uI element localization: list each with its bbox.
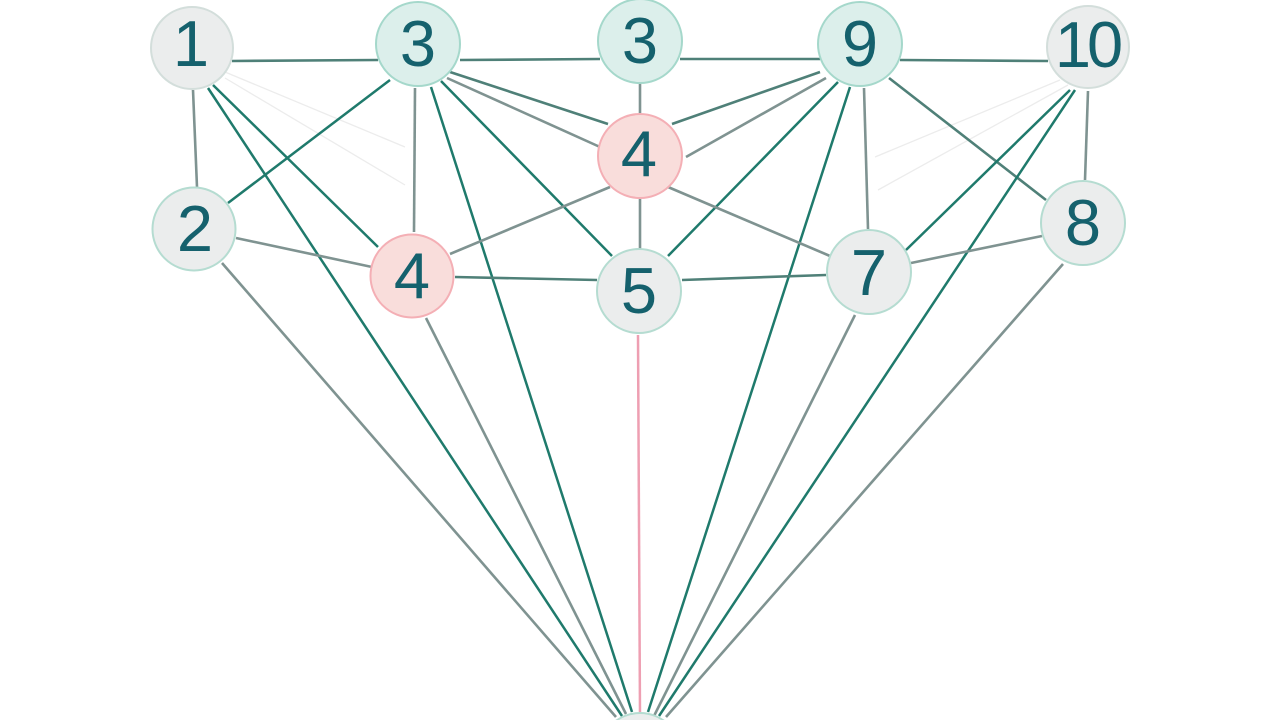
node 9: 9 xyxy=(842,7,878,80)
node 4 left, highlighted: 4 xyxy=(394,239,430,312)
node 4 left, highlighted xyxy=(370,234,454,318)
connecting lines xyxy=(193,59,1088,717)
node 2 xyxy=(152,188,236,270)
node 8 xyxy=(1041,181,1125,265)
node 4 center, highlighted xyxy=(598,114,682,198)
bottom node, cropped by the edge xyxy=(599,713,681,720)
node 7 xyxy=(827,230,911,314)
node 3 center: 3 xyxy=(622,4,658,77)
node 3 left xyxy=(376,2,460,86)
node 5: 5 xyxy=(621,254,657,327)
node 2: 2 xyxy=(177,192,213,265)
node 3 center xyxy=(598,0,682,83)
node 1: 1 xyxy=(173,7,209,80)
node 8: 8 xyxy=(1065,186,1101,259)
node 10 xyxy=(1047,6,1129,88)
node 7: 7 xyxy=(851,236,887,309)
node 10: 10 xyxy=(1055,8,1121,81)
node 3 left: 3 xyxy=(400,7,436,80)
node 5 xyxy=(597,249,681,333)
node 1 xyxy=(151,7,233,89)
node 9 xyxy=(818,2,902,86)
node 4 center, highlighted: 4 xyxy=(621,117,657,190)
